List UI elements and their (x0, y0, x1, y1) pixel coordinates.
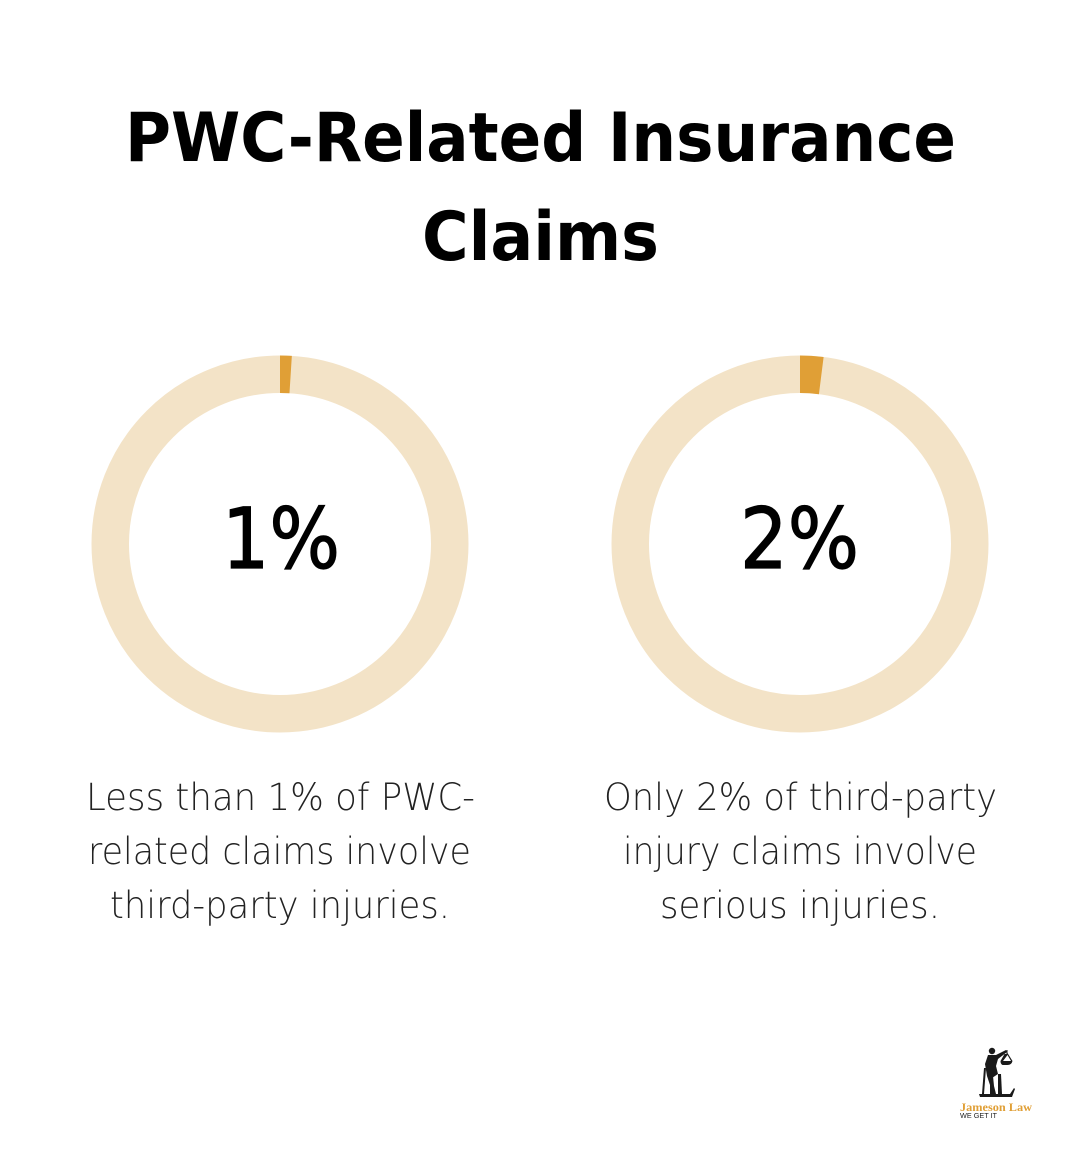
panel: 1% statistic (86, 356, 475, 927)
description: 2%: Only 2% of third-party (604, 776, 997, 819)
title: PWC-Related Insurance (125, 99, 956, 178)
donut chart: 2% (630, 356, 970, 714)
logo: Jameson Law (960, 1048, 1033, 1120)
description: 1% (86, 776, 475, 927)
donut chart: 1% (110, 356, 450, 714)
logo name: Jameson Law (960, 1102, 1033, 1114)
description: 1%: Less than 1% of PWC- (86, 776, 475, 819)
logo tagline: WE GET IT (960, 1113, 998, 1120)
title: Claims (422, 198, 659, 277)
description: 1%: third-party injuries. (110, 884, 450, 927)
donut chart: 1%: 1% (222, 490, 340, 588)
description: 2%: serious injuries. (660, 884, 940, 927)
description: 2%: injury claims involve (623, 830, 977, 873)
panel: 2% statistic (604, 356, 997, 927)
description: 2% (604, 776, 997, 927)
donut chart: 2%: 2% (740, 490, 859, 588)
icon: lady justice (979, 1048, 1015, 1097)
description: 1%: related claims involve (88, 830, 471, 873)
title (125, 99, 956, 277)
